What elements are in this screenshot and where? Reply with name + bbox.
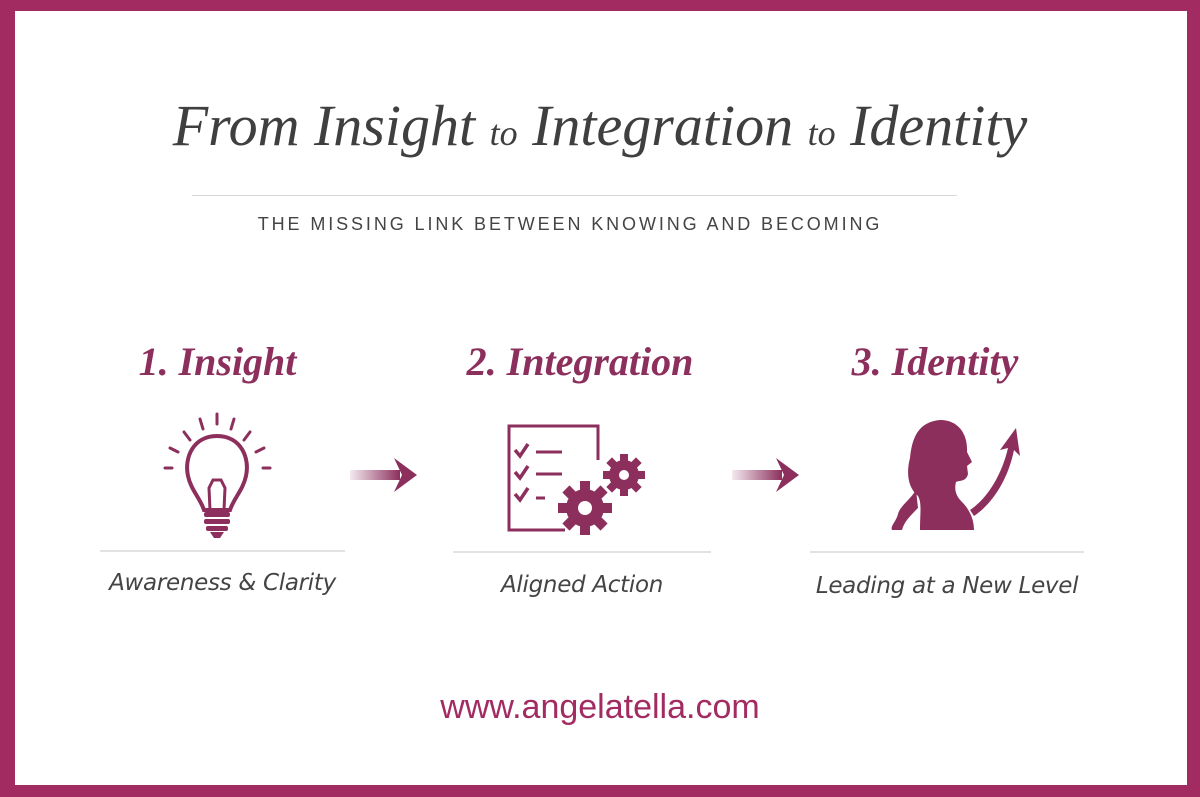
step 3 heading: 3. Identity: [852, 339, 1018, 384]
step 2 heading: 2. Integration: [467, 339, 693, 384]
website url: www.angelatella.com: [440, 688, 760, 726]
caption 3: Leading at a New Level: [816, 573, 1078, 599]
caption 2: Aligned Action: [501, 572, 663, 598]
arrow 1: [350, 458, 417, 492]
icon: woman silhouette with rising arrow: [892, 420, 1020, 530]
subtitle: THE MISSING LINK BETWEEN KNOWING AND BECOMING: [258, 214, 882, 234]
dividers: [100, 550, 345, 552]
arrow 2: [732, 458, 799, 492]
icon: checklist with gears: [508, 424, 645, 535]
caption 1: Awareness & Clarity: [109, 570, 336, 596]
title: From Insight to Integration to Identity: [173, 93, 1027, 158]
step 1 heading: 1. Insight: [139, 339, 296, 384]
icon: lightbulb: [164, 412, 272, 538]
